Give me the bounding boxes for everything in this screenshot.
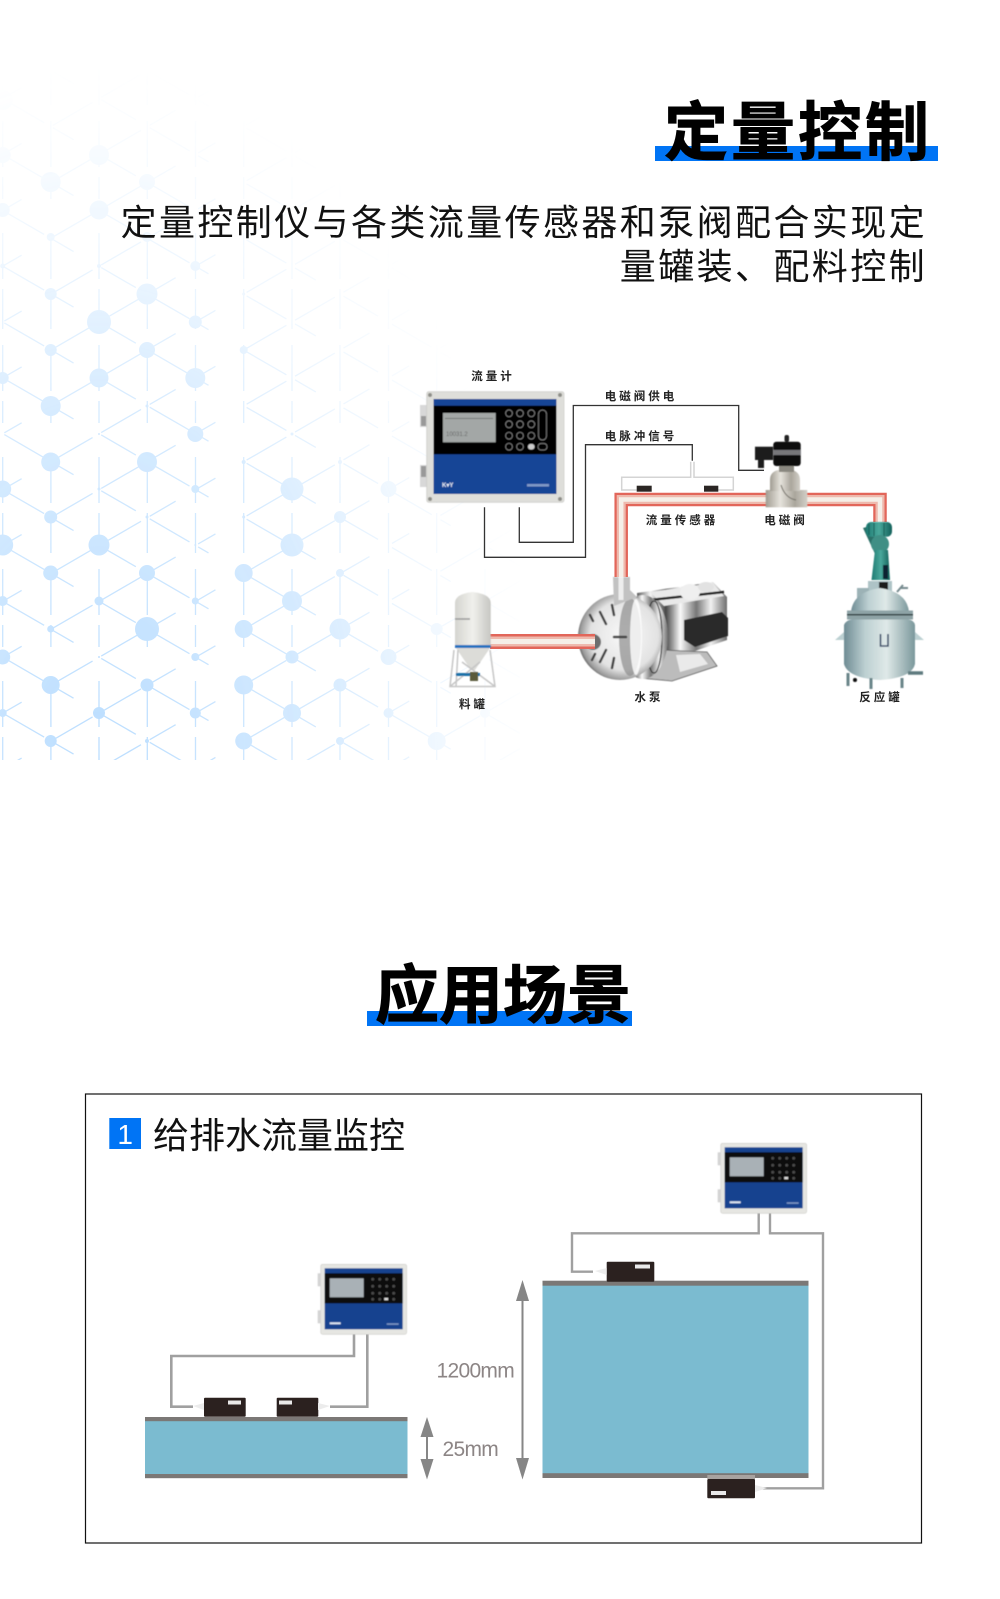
icon: pump (578, 577, 728, 681)
sensor: bottom (707, 1475, 767, 1498)
heading: 应用场景: 应用场景 (375, 945, 631, 1037)
sensor: top (595, 1262, 654, 1282)
icon: hopper tank (450, 592, 495, 686)
water: large pipe (542, 1281, 808, 1478)
pipe: feed red pipe (490, 634, 595, 649)
sensor: right (277, 1398, 330, 1417)
sensor: flow sensor left (637, 486, 652, 492)
heading: 定量控制: 定量控制 (664, 82, 932, 174)
process diagram (420, 368, 924, 712)
label: 水泵: 水泵 (634, 689, 664, 705)
panel title: 给排水流量监控 (153, 1107, 405, 1159)
label: 反应罐: 反应罐 (859, 689, 903, 705)
label: 流量计: 流量计 (471, 368, 515, 384)
icon: flow meter small left (318, 1264, 407, 1334)
icon: flow meter (420, 392, 564, 502)
label: 电磁阀: 电磁阀 (764, 512, 808, 528)
panel: application scene 1 (86, 1094, 922, 1543)
cables (572, 1213, 823, 1488)
icon: flow meter small right (718, 1143, 807, 1213)
diagram: small pipe 25mm (145, 1264, 408, 1478)
label: 1200mm: 1200mm (436, 1360, 514, 1383)
badge: number 1: 1 (117, 1119, 133, 1150)
cables (171, 1334, 367, 1407)
diagram: large pipe 1200mm (542, 1143, 823, 1498)
pipe: upper red pipe (621, 500, 880, 577)
water: small pipe (145, 1417, 408, 1478)
arrow: 25mm dimension (420, 1417, 434, 1480)
text block: description: 定量控制仪与各类流量传感器和泵阀配合实现定 (121, 194, 927, 246)
text block: description (121, 194, 927, 290)
label: 流量传感器: 流量传感器 (646, 512, 718, 528)
sensor: flow sensor right (704, 486, 718, 492)
wire: sensor cables (622, 462, 733, 490)
label: 电磁阀供电: 电磁阀供电 (605, 388, 677, 404)
icon: solenoid valve (755, 435, 807, 507)
label: 料罐: 料罐 (459, 696, 488, 712)
badge: number 1 (109, 1118, 141, 1150)
sensor: left (193, 1398, 246, 1417)
icon: flow meter: K▾Y (442, 483, 453, 489)
label: 25mm: 25mm (442, 1438, 498, 1461)
wire: solenoid valve power (519, 406, 764, 542)
icon: reactor tank (835, 522, 924, 689)
icon: flow meter: 10031.2 (446, 432, 468, 438)
label: 电脉冲信号: 电脉冲信号 (605, 428, 677, 444)
arrow: 1200mm dimension (516, 1280, 529, 1480)
text block: description: 量罐装、配料控制 (620, 238, 927, 290)
background: hexagonal network pattern (0, 157, 482, 760)
wire: pulse signal (484, 445, 692, 557)
